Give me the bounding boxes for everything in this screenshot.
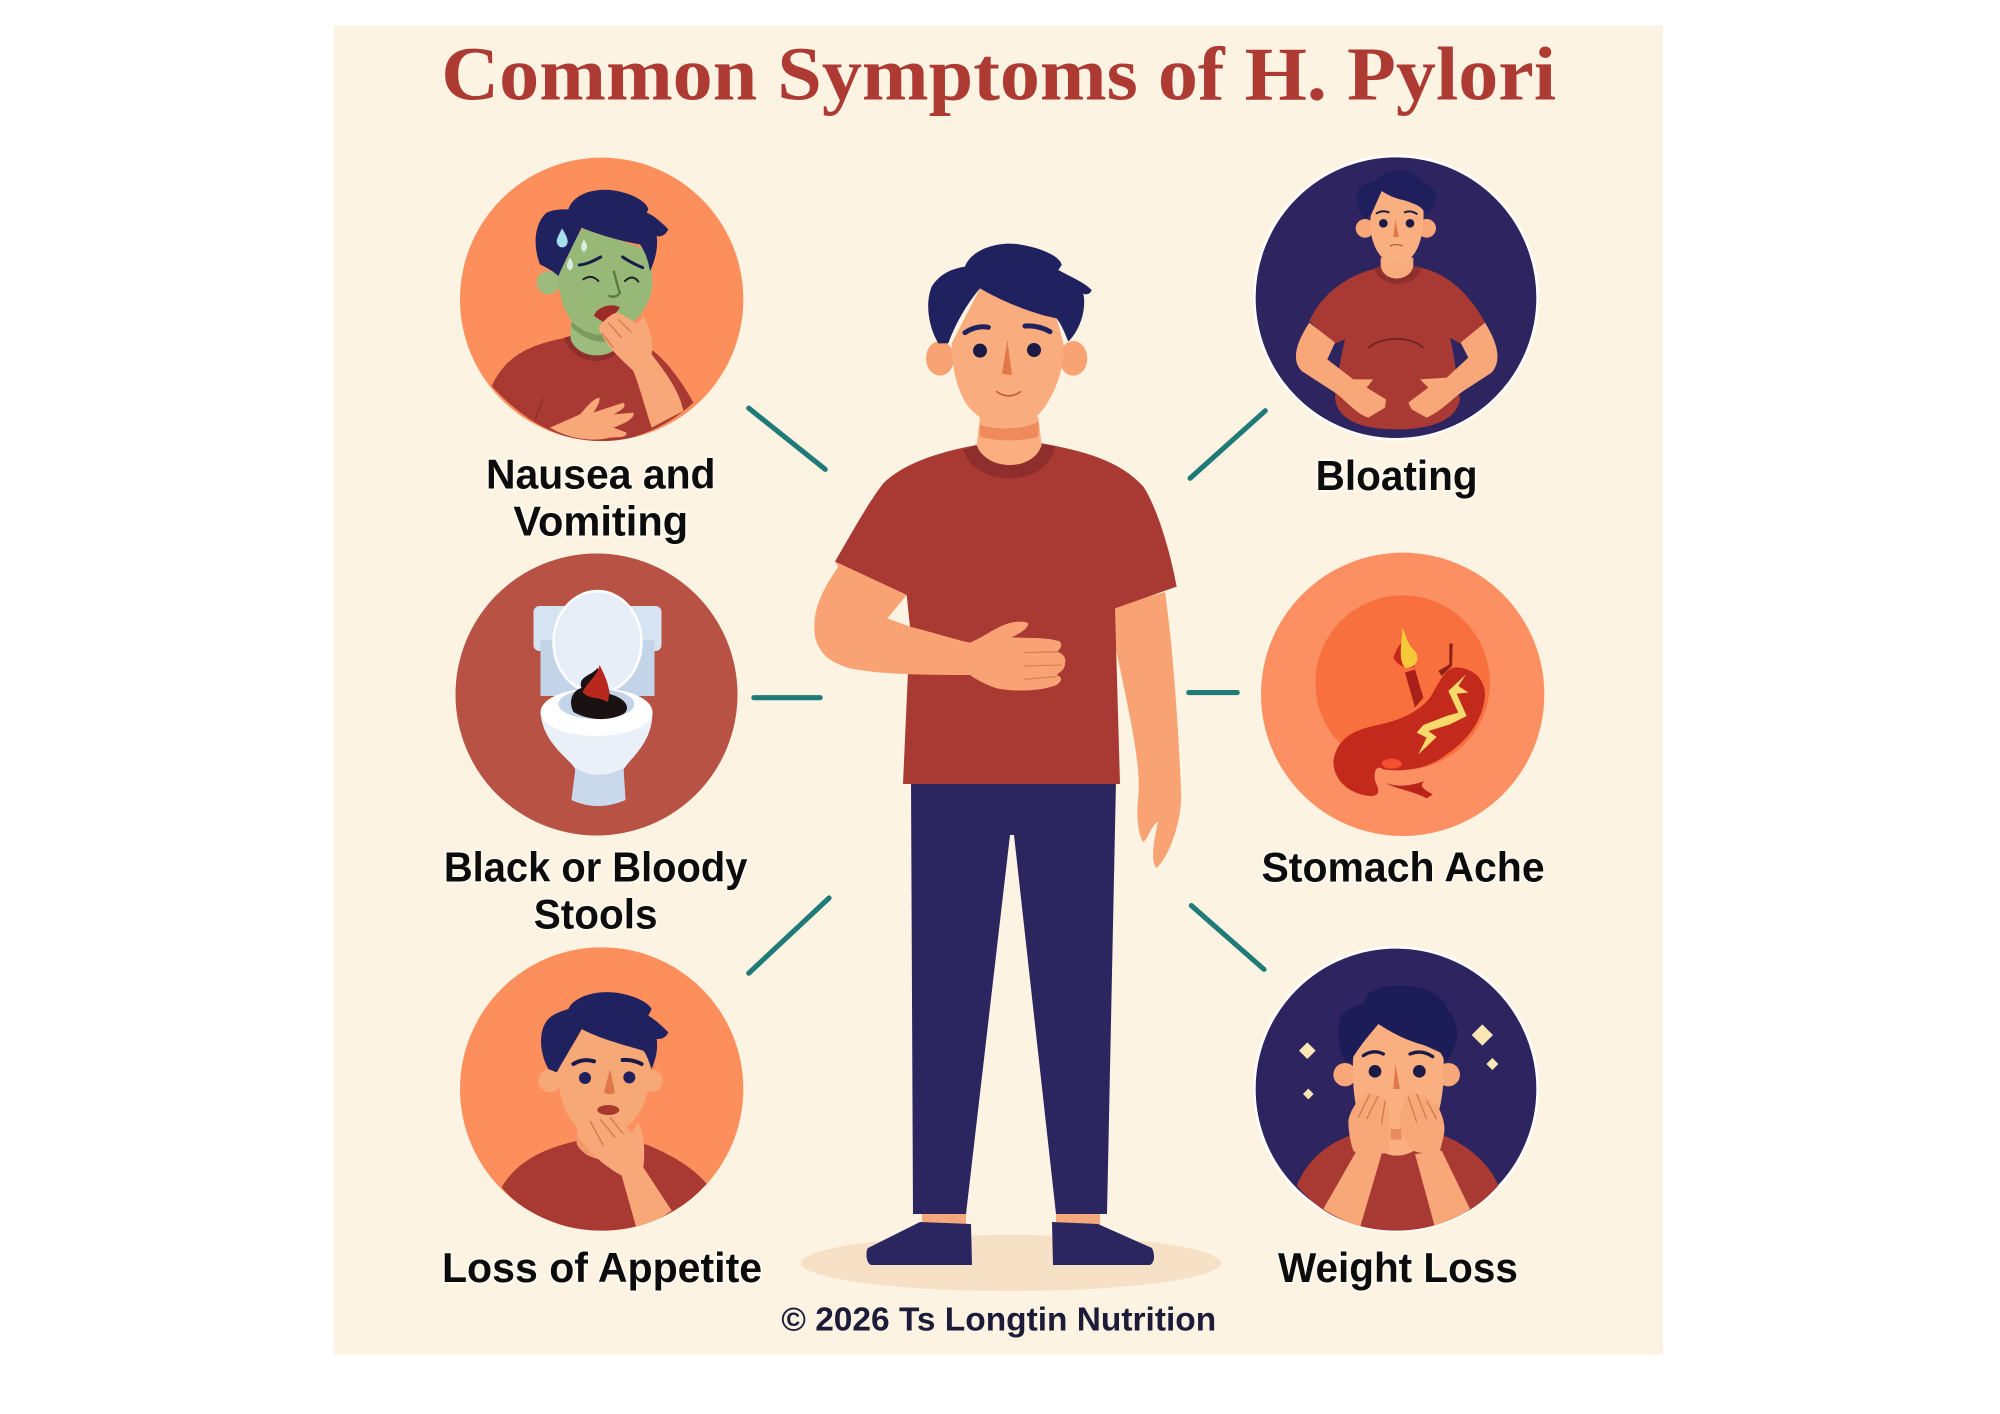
label line 2: Stools	[534, 891, 658, 938]
ankles	[922, 1205, 1100, 1230]
collar	[963, 443, 1055, 478]
label: Nausea and	[486, 451, 716, 498]
nose	[1002, 340, 1012, 375]
smile	[997, 392, 1021, 396]
shirt	[835, 443, 1177, 784]
infographic canvas	[334, 26, 1663, 1354]
face	[952, 288, 1064, 427]
panel: nausea and vomiting	[460, 158, 743, 545]
panel: loss of appetite	[442, 947, 762, 1291]
right arm	[1108, 592, 1181, 868]
ears	[926, 341, 1087, 376]
hair	[928, 244, 1092, 343]
legs	[911, 780, 1116, 1214]
icon: nauseous person in orange circle	[460, 158, 743, 443]
left arm and hand	[814, 562, 1065, 691]
icon: person covering mouth in orange circle	[460, 947, 743, 1232]
label: Bloating	[1316, 452, 1478, 499]
panel: black or bloody stools	[444, 554, 748, 938]
finger lines	[1023, 652, 1062, 679]
eyes	[973, 343, 1041, 358]
label: Black or Bloody	[444, 843, 748, 890]
panel: bloating	[1254, 156, 1538, 499]
neck	[977, 417, 1042, 465]
label: Loss of Appetite	[442, 1244, 762, 1291]
icon: brick circle	[456, 554, 738, 836]
upper body traced	[814, 244, 1177, 784]
central figure	[801, 244, 1221, 1291]
neck shadow	[980, 422, 1038, 440]
label line 2: Vomiting	[513, 498, 688, 545]
icon: bloated person in navy circle	[1254, 156, 1538, 439]
label: Stomach Ache	[1261, 843, 1545, 890]
title: Common Symptoms of H. Pylori	[441, 31, 1556, 116]
icon: stomach in orange circle	[1261, 553, 1544, 836]
panel: cream background	[334, 26, 1663, 1354]
eyebrows	[965, 326, 1050, 333]
panel: stomach ache	[1261, 553, 1545, 890]
panel: weight loss	[1254, 947, 1538, 1291]
shoes	[866, 1222, 1154, 1265]
label: Weight Loss	[1278, 1244, 1518, 1291]
copyright footer: © 2026 Ts Longtin Nutrition	[781, 1301, 1216, 1338]
connector lines	[749, 408, 1265, 973]
icon: person holding face in navy circle	[1254, 947, 1538, 1232]
ground shadow	[801, 1235, 1221, 1291]
icon: toilet	[534, 591, 662, 806]
